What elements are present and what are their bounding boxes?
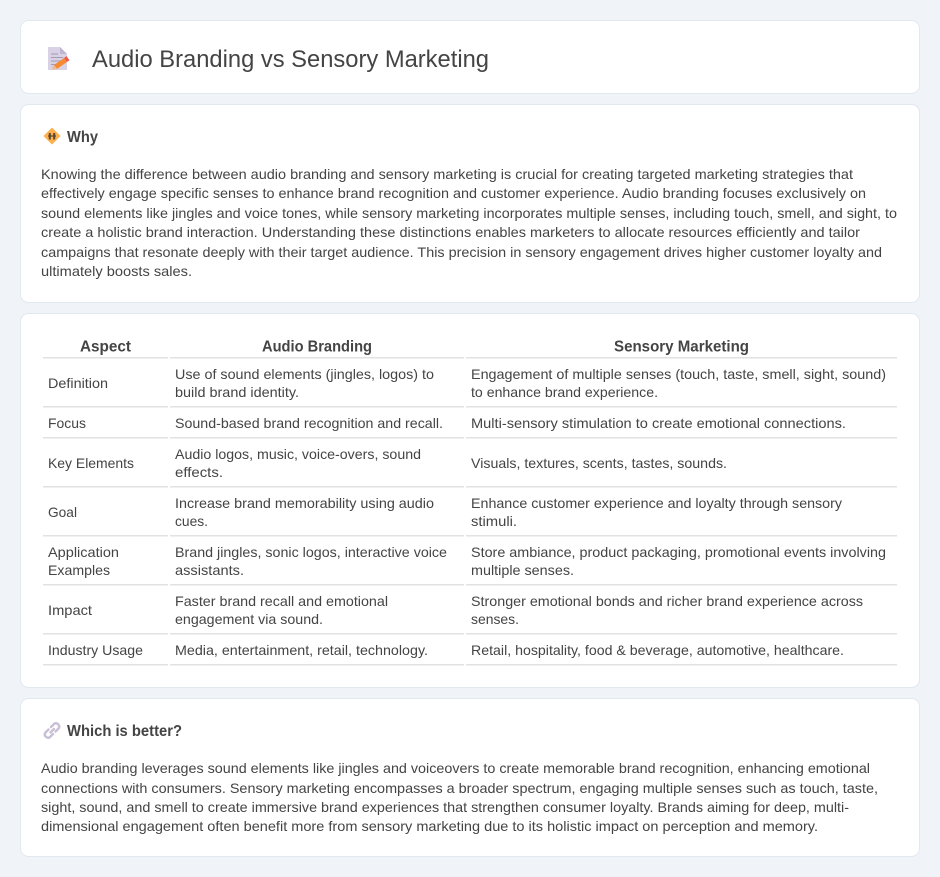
row: definition: Definition — [48, 375, 108, 391]
heading: which is better: Which is better? — [67, 723, 182, 740]
row: goal: Increase brand memorability using audio — [175, 495, 434, 511]
row: impact — [48, 593, 863, 627]
table header row: Aspect — [80, 338, 132, 356]
row: industry usage: Industry Usage — [48, 642, 143, 658]
row: definition — [48, 366, 886, 400]
row: industry usage — [48, 642, 844, 658]
table header row: Audio Branding — [262, 338, 372, 356]
row: definition: to enhance brand experience. — [471, 384, 658, 400]
row: goal: stimuli. — [471, 513, 517, 529]
text block: why: Knowing the difference between audio branding and sensory marketing is crucial for creating targeted marketing strategies that — [41, 166, 853, 182]
row: application examples: assistants. — [175, 562, 244, 578]
row: focus: Sound-based brand recognition and recall. — [175, 415, 443, 431]
panel: which is better — [20, 698, 920, 856]
panel: header — [20, 20, 920, 94]
row: goal: Enhance customer experience and loyalty through sensory — [471, 495, 842, 511]
title: Audio Branding vs Sensory Marketing — [92, 46, 489, 73]
row: goal: cues. — [175, 513, 208, 529]
row: focus: Multi-sensory stimulation to create emotional connections. — [471, 415, 846, 431]
row: goal — [48, 495, 842, 529]
row: application examples: Store ambiance, product packaging, promotional events involving — [471, 544, 886, 560]
text block: why: create a holistic brand interaction. Understanding these distinctions enables marketers to allocate resources efficiently and tailor — [41, 224, 860, 240]
icon: document with pencil — [48, 47, 68, 70]
text block: why: sound elements like jingles and voice tones, while sensory marketing incorporates multiple senses, including touch, smell, and sight, to — [41, 205, 897, 221]
icon: warning diamond — [44, 128, 60, 144]
table header row — [80, 338, 749, 356]
row: application examples: Examples — [48, 562, 110, 578]
table header row: Sensory Marketing — [614, 338, 749, 356]
text block: why: effectively engage specific senses to enhance brand recognition and customer experience. Audio branding focuses exclusively on — [41, 185, 866, 201]
text block: which is better: dimensional engagement often benefit more from sensory marketing due to its holistic impact on perception and memory. — [41, 818, 818, 834]
row: key elements: Visuals, textures, scents, tastes, sounds. — [471, 455, 727, 471]
panel: comparison table — [20, 314, 920, 688]
row: impact: Impact — [48, 602, 92, 618]
row: goal: Goal — [48, 504, 77, 520]
row: application examples: multiple senses. — [471, 562, 574, 578]
row: key elements: Key Elements — [48, 455, 134, 471]
text block: which is better: connections with consumers. Sensory marketing encompasses a broader spectrum, engaging multiple senses such as touch, taste, — [41, 780, 878, 796]
row: key elements: effects. — [175, 464, 223, 480]
row: industry usage: Media, entertainment, retail, technology. — [175, 642, 428, 658]
icon: link — [45, 723, 59, 738]
row: definition: build brand identity. — [175, 384, 299, 400]
row: definition: Engagement of multiple senses (touch, taste, smell, sight, sound) — [471, 366, 886, 382]
row: application examples — [48, 544, 886, 578]
text block: which is better — [41, 760, 878, 834]
row: application examples: Application — [48, 544, 119, 560]
text block: why — [41, 166, 897, 279]
heading: why: Why — [67, 129, 98, 146]
row: application examples: Brand jingles, sonic logos, interactive voice — [175, 544, 447, 560]
row: impact: senses. — [471, 611, 519, 627]
text block: which is better: Audio branding leverages sound elements like jingles and voiceovers to create memorable brand recognition, enhancing emotional — [41, 760, 870, 776]
row: impact: engagement via sound. — [175, 611, 323, 627]
row: impact: Stronger emotional bonds and richer brand experience across — [471, 593, 863, 609]
text block: why: ultimately boosts sales. — [41, 263, 192, 279]
panel: why — [20, 104, 920, 302]
row: key elements: Audio logos, music, voice-overs, sound — [175, 446, 421, 462]
row: impact: Faster brand recall and emotional — [175, 593, 388, 609]
row: focus — [48, 415, 846, 431]
row: industry usage: Retail, hospitality, food & beverage, automotive, healthcare. — [471, 642, 844, 658]
row: key elements — [48, 446, 727, 480]
text block: which is better: sight, sound, and smell to create immersive brand experiences that strengthen consumer loyalty. Brands aiming for deep, multi- — [41, 799, 849, 815]
text block: why: campaigns that resonate deeply with their target audience. This precision in sensory engagement drives higher customer loyalty and — [41, 244, 882, 260]
row: focus: Focus — [48, 415, 86, 431]
row: definition: Use of sound elements (jingles, logos) to — [175, 366, 434, 382]
